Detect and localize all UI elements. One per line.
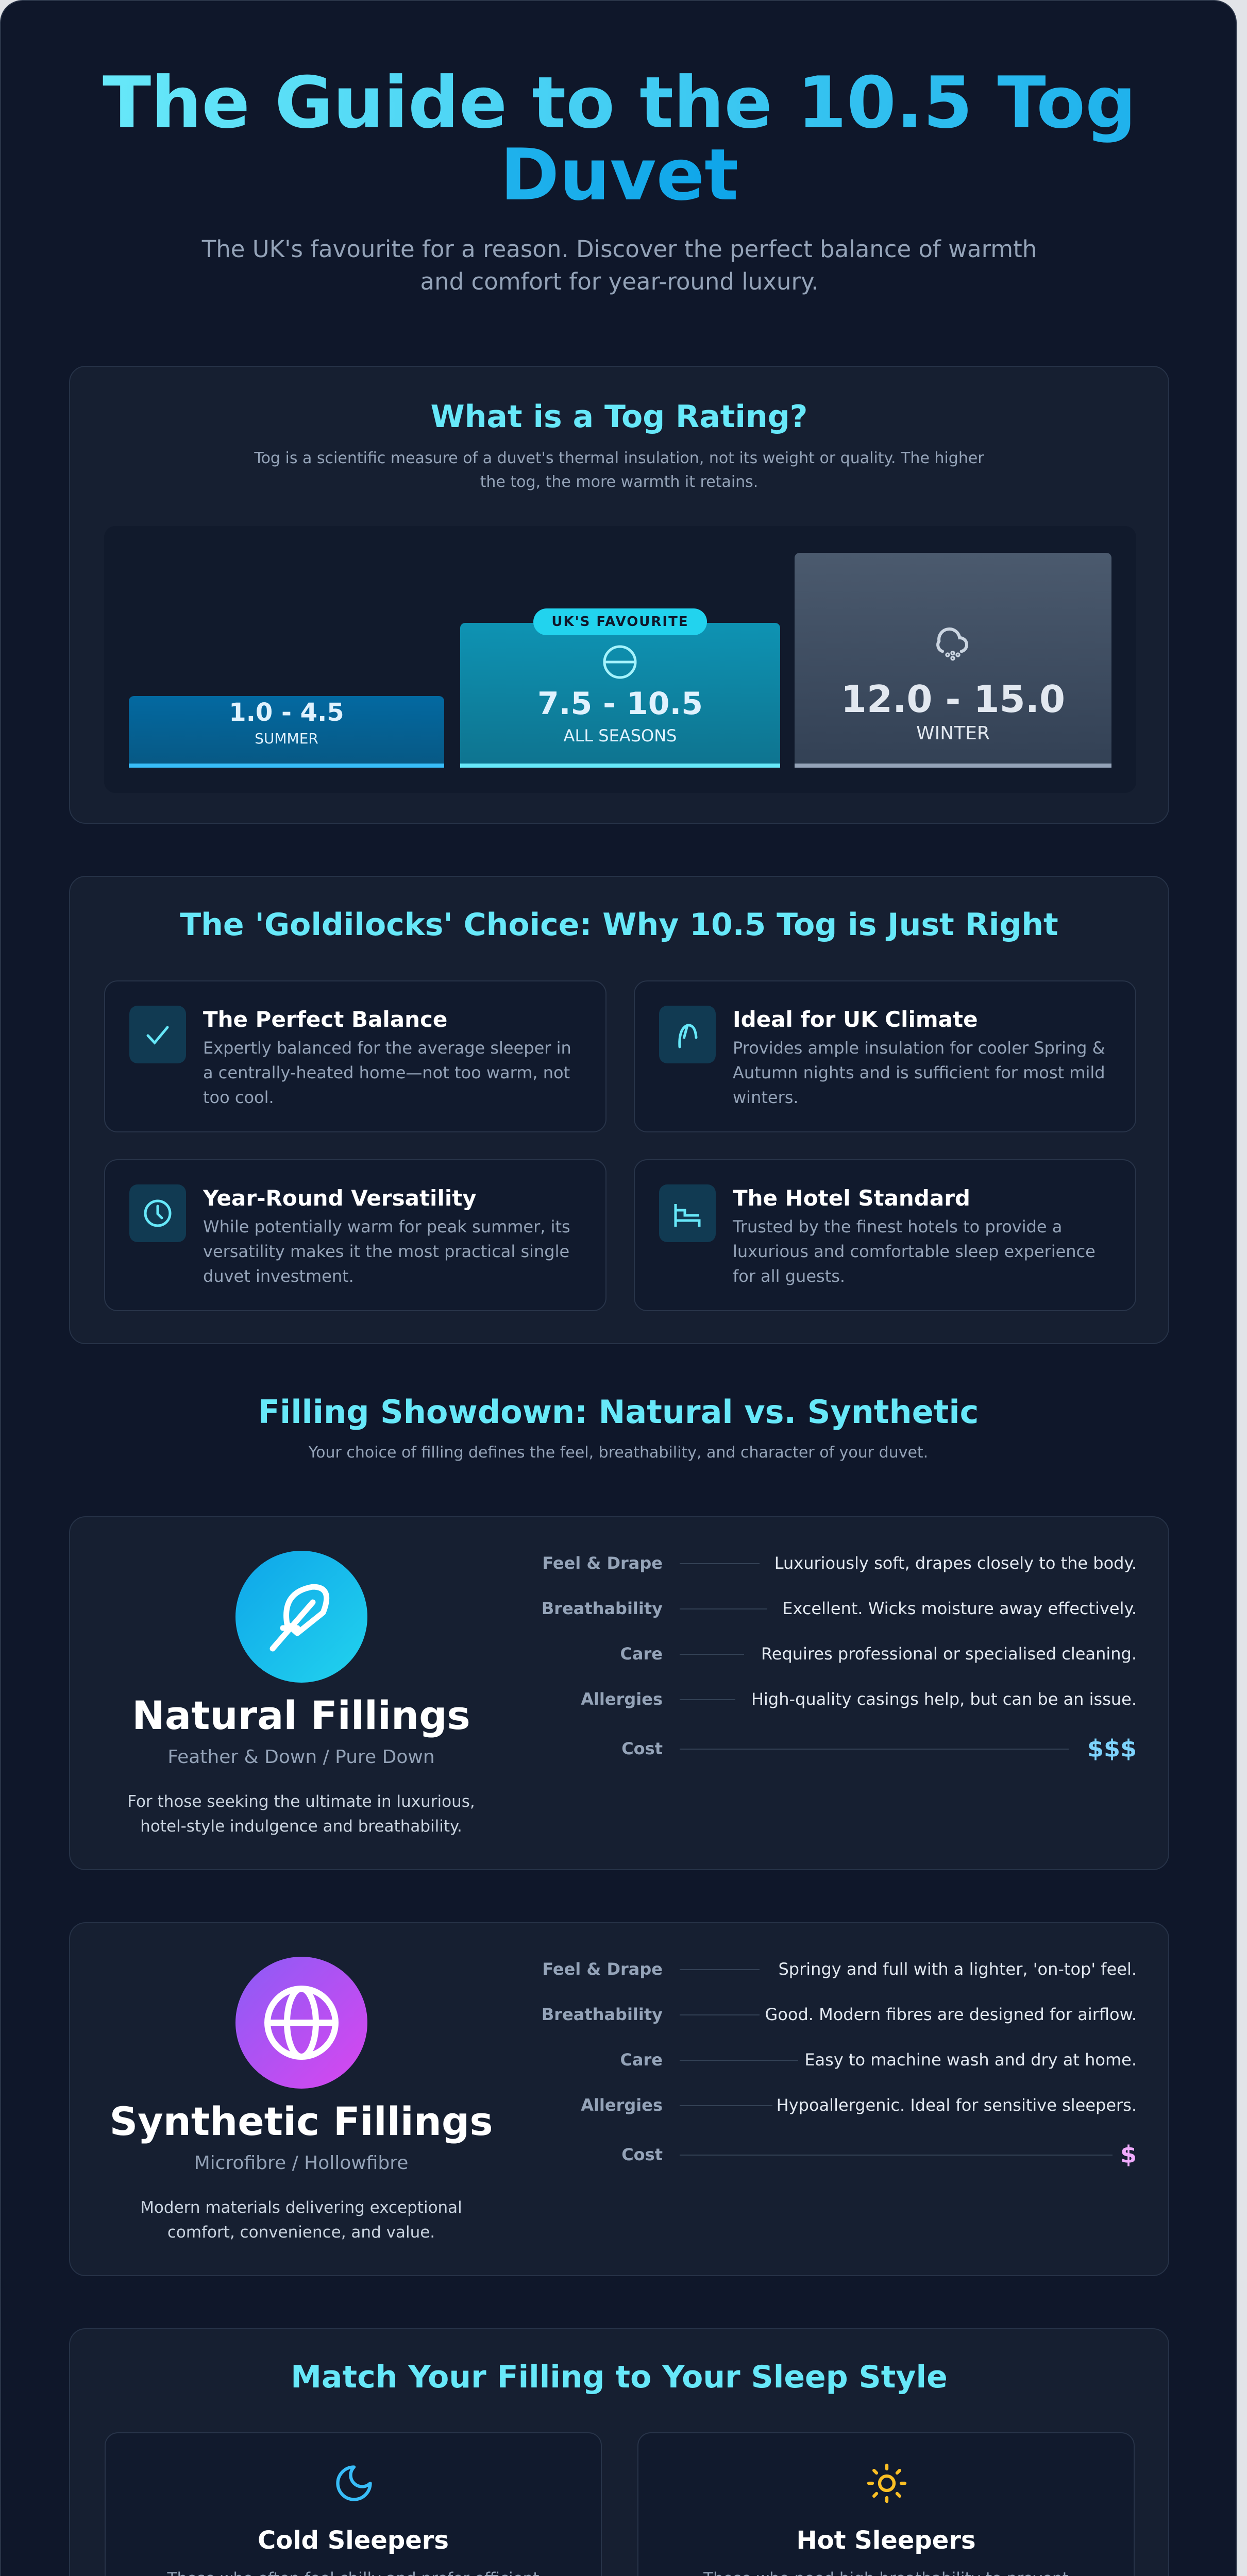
heading: goldilocks: The 'Goldilocks' Choice: Why 10.5 Tog is Just Right [180, 907, 1058, 943]
card: cold sleepers: Cold Sleepers [258, 2526, 449, 2555]
table: synthetic properties: Care [620, 2050, 663, 2070]
panel: synthetic fillings: Microfibre / Hollowfibre [194, 2153, 408, 2174]
table: synthetic properties: Breathability [542, 2005, 663, 2024]
card: hotel standard: The Hotel Standard [733, 1185, 970, 1211]
icon: cloud snow [936, 628, 969, 660]
bar: winter [795, 553, 1111, 768]
card: perfect balance: The Perfect Balance [203, 1007, 447, 1032]
text: showdown subtitle: Your choice of filling defines the feel, breathability, and character of your duvet. [309, 1444, 928, 1462]
text: tog description: the tog, the more warmth it retains. [480, 473, 758, 491]
table: natural properties [542, 1553, 1137, 1762]
title: Duvet [500, 133, 738, 216]
card: uk climate: Provides ample insulation for cooler Spring & Autumn nights and is sufficient for most mild winters. [733, 1038, 1105, 1107]
bar: summer: SUMMER [255, 730, 318, 747]
card: year-round [104, 1159, 606, 1311]
heading: filling showdown: Filling Showdown: Natural vs. Synthetic [258, 1393, 979, 1431]
table: natural properties: Breathability [542, 1599, 663, 1618]
table: natural properties: Excellent. Wicks moisture away effectively. [782, 1599, 1137, 1618]
card: year-round: Year-Round Versatility [203, 1185, 477, 1211]
table: natural properties: Feel & Drape [542, 1553, 663, 1573]
subtitle: and comfort for year-round luxury. [420, 268, 818, 295]
table: synthetic properties [542, 1959, 1137, 2168]
card: year-round: While potentially warm for peak summer, its versatility makes it the most practical single duvet investment. [203, 1217, 570, 1286]
title: The Guide to the 10.5 Tog [103, 61, 1136, 144]
table: natural properties: $$$ [1087, 1735, 1137, 1762]
table: synthetic properties: Allergies [581, 2095, 663, 2115]
panel: sleep style [69, 2328, 1169, 2576]
heading: sleep style: Match Your Filling to Your Sleep Style [291, 2359, 948, 2395]
panel: natural fillings [69, 1516, 1169, 1870]
bar: all seasons [460, 623, 780, 768]
table: natural properties: Allergies [581, 1689, 663, 1709]
table: natural properties: High-quality casings help, but can be an issue. [751, 1689, 1137, 1709]
bar: winter: WINTER [916, 723, 990, 744]
bar: all seasons: ALL SEASONS [564, 726, 677, 745]
panel: natural fillings: hotel-style indulgence and breathability. [140, 1817, 462, 1836]
bar: winter: 12.0 - 15.0 [841, 677, 1065, 721]
bar: summer: 1.0 - 4.5 [229, 698, 344, 727]
icon: sun [867, 2464, 907, 2503]
card: perfect balance [104, 980, 606, 1132]
card: perfect balance: Expertly balanced for the average sleeper in a centrally-heated home—not too warm, not too cool. [203, 1038, 571, 1107]
card: uk climate [634, 980, 1136, 1132]
table: natural properties: Care [620, 1644, 663, 1664]
text: tog description [254, 449, 984, 491]
table: synthetic properties: $ [1120, 2141, 1137, 2168]
heading: tog rating: What is a Tog Rating? [431, 399, 807, 435]
card: cold sleepers [105, 2432, 602, 2576]
card: hot sleepers: Hot Sleepers [796, 2526, 976, 2555]
table: natural properties: Luxuriously soft, drapes closely to the body. [774, 1553, 1137, 1573]
text: natural title: Natural Fillings [132, 1692, 470, 1738]
card: hotel standard [634, 1159, 1136, 1311]
table: natural properties: Requires professional or specialised cleaning. [761, 1644, 1137, 1664]
panel: goldilocks choice [69, 876, 1169, 1344]
bar: all seasons: 7.5 - 10.5 [537, 686, 703, 722]
subtitle [202, 235, 1037, 295]
icon: clock [129, 1184, 186, 1242]
card: hotel standard: Trusted by the finest hotels to provide a luxurious and comfortable sleep experience for all guests. [733, 1217, 1096, 1286]
table: synthetic properties: Easy to machine wash and dry at home. [804, 2050, 1137, 2070]
icon: feather circle [235, 1551, 367, 1683]
icon: bed [659, 1184, 716, 1242]
table: synthetic properties: Cost [621, 2145, 663, 2164]
card: hot sleepers [637, 2432, 1135, 2576]
icon: moon [336, 2465, 372, 2501]
table: synthetic properties: Springy and full with a lighter, 'on-top' feel. [778, 1959, 1137, 1979]
table: natural properties: Cost [621, 1739, 663, 1758]
text: synthetic title: Synthetic Fillings [109, 2098, 493, 2144]
icon: umbrella [659, 1006, 716, 1063]
table: synthetic properties: Feel & Drape [542, 1959, 663, 1979]
panel: synthetic fillings: comfort, convenience, and value. [167, 2223, 435, 2242]
panel: natural fillings: Feather & Down / Pure Down [167, 1747, 435, 1768]
subtitle: The UK's favourite for a reason. Discover the perfect balance of warmth [202, 235, 1037, 263]
panel: natural fillings: For those seeking the ultimate in luxurious, [127, 1792, 475, 1811]
title [103, 61, 1136, 216]
icon: circle line [603, 645, 637, 679]
table: synthetic properties: Good. Modern fibres are designed for airflow. [765, 2005, 1137, 2024]
badge: uk's favourite [533, 608, 707, 635]
table: synthetic properties: Hypoallergenic. Ideal for sensitive sleepers. [777, 2095, 1137, 2115]
card: uk climate: Ideal for UK Climate [733, 1007, 978, 1032]
chart: tog bars [104, 526, 1136, 793]
bar: summer [129, 696, 444, 768]
panel: synthetic fillings [69, 1922, 1169, 2276]
panel: what is a tog rating [69, 366, 1169, 824]
icon: globe circle [235, 1957, 367, 2089]
text: tog description: Tog is a scientific measure of a duvet's thermal insulation, not its weight or quality. The higher [254, 449, 984, 467]
panel: synthetic fillings: Modern materials delivering exceptional [140, 2198, 462, 2217]
badge: uk's favourite: UK'S FAVOURITE [551, 614, 689, 630]
icon: check [129, 1006, 186, 1063]
